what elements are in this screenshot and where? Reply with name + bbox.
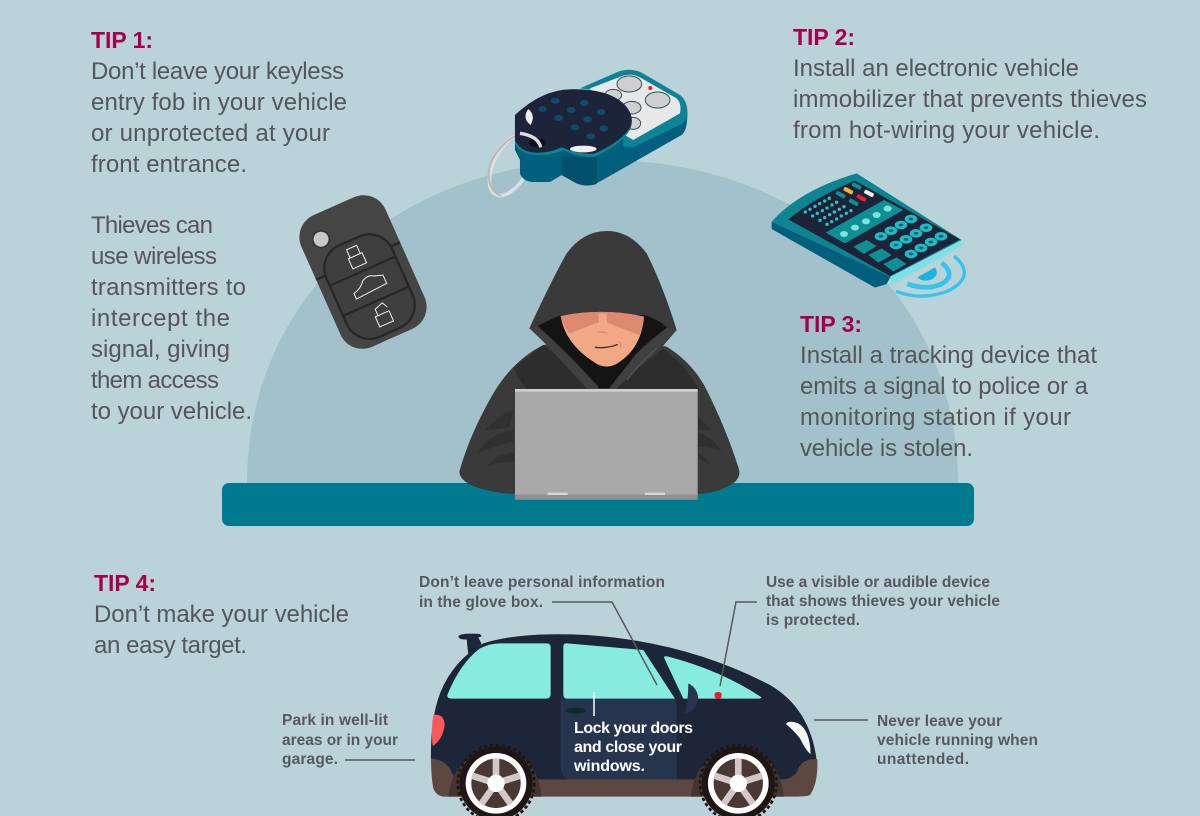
- TIP 1 body: entry fob in your vehicle: [91, 89, 347, 116]
- TIP 3 heading: TIP 3:: [800, 311, 862, 337]
- callout: visible or audible device: [720, 574, 1000, 686]
- callout: visible or audible device: is protected.: [766, 612, 860, 629]
- door panel: [561, 699, 677, 779]
- TIP 1 heading: TIP 1:: [91, 27, 153, 53]
- callout: glove box: Don’t leave personal information: [419, 574, 665, 591]
- icon: flip key fob: [292, 188, 434, 356]
- callout: visible or audible device: that shows thieves your vehicle: [766, 593, 1000, 610]
- laptop: [515, 389, 698, 500]
- TIP 1 body: front entrance.: [91, 151, 247, 178]
- hacker body: [459, 337, 739, 494]
- roof spoiler: [458, 634, 482, 655]
- red alarm light: [715, 692, 722, 699]
- callout: lock your doors: Lock your doors: [574, 720, 693, 737]
- windows: [447, 643, 762, 699]
- TIP 3 body: Install a tracking device that: [800, 342, 1097, 369]
- TIP 1 body: transmitters to: [91, 274, 246, 301]
- TIP 4 text block: [94, 570, 349, 659]
- front wheel: [691, 745, 784, 816]
- TIP 2 body: Install an electronic vehicle: [793, 55, 1079, 82]
- TIP 4 heading: TIP 4:: [94, 570, 156, 596]
- TIP 3 body: monitoring station if your: [800, 404, 1071, 431]
- callout: lock your doors: windows.: [573, 758, 645, 775]
- brown lower trim: [431, 758, 817, 797]
- TIP 1 body: [91, 58, 347, 425]
- headlight: [786, 722, 811, 754]
- callout: glove box: in the glove box.: [419, 594, 543, 611]
- car body: [431, 634, 817, 780]
- TIP 1 body: to your vehicle.: [91, 398, 252, 425]
- door handle: [566, 708, 586, 714]
- TIP 3 text block: [800, 311, 1097, 462]
- callout: park in well-lit areas: areas or in your: [282, 732, 398, 749]
- TIP 4 body: [94, 601, 349, 659]
- TIP 4 body: Don’t make your vehicle: [94, 601, 349, 628]
- TIP 2 body: immobilizer that prevents thieves: [793, 86, 1147, 113]
- hood: [529, 231, 677, 390]
- icon: alarm keypad device with signal waves: [772, 173, 964, 296]
- TIP 3 body: [800, 342, 1097, 462]
- callout: never leave vehicle running: [814, 713, 1038, 768]
- callout: never leave vehicle running: unattended.: [877, 751, 969, 768]
- callout: park in well-lit areas: [282, 712, 415, 768]
- TIP 1 body: use wireless: [91, 243, 217, 270]
- callout: never leave vehicle running: vehicle running when: [877, 732, 1038, 749]
- TIP 1 body: them access: [91, 367, 219, 394]
- TIP 1 text block: [91, 27, 347, 425]
- callout: park in well-lit areas: Park in well-lit: [282, 712, 388, 729]
- icon: remote key fob with ring: [480, 70, 687, 203]
- callout: never leave vehicle running: Never leave your: [877, 713, 1002, 730]
- TIP 1 body: or unprotected at your: [91, 120, 330, 147]
- callout: lock your doors: [573, 692, 693, 775]
- callout: lock your doors: and close your: [574, 739, 682, 756]
- TIP 1 body: Don’t leave your keyless: [91, 58, 344, 85]
- TIP 2 text block: [793, 24, 1147, 144]
- rear wheel: [448, 745, 542, 816]
- callout: visible or audible device: Use a visible or audible device: [766, 574, 990, 591]
- desk: [222, 483, 974, 526]
- tail light: [432, 715, 445, 746]
- callout: park in well-lit areas: garage.: [282, 751, 338, 768]
- face: [561, 312, 644, 367]
- background dome: [247, 160, 958, 484]
- TIP 1 body: intercept the: [91, 305, 230, 332]
- TIP 1 body: Thieves can: [91, 212, 213, 239]
- TIP 2 heading: TIP 2:: [793, 24, 855, 50]
- key ring: [480, 127, 542, 203]
- TIP 4 body: an easy target.: [94, 632, 247, 659]
- callout: glove box: [419, 574, 665, 685]
- TIP 3 body: emits a signal to police or a: [800, 373, 1089, 400]
- car illustration: [431, 634, 817, 816]
- TIP 2 body: from hot-wiring your vehicle.: [793, 117, 1100, 144]
- side mirror: [685, 683, 698, 714]
- hooded hacker at laptop: [459, 231, 739, 500]
- TIP 2 body: [793, 55, 1147, 144]
- TIP 1 body: signal, giving: [91, 336, 230, 363]
- TIP 3 body: vehicle is stolen.: [800, 435, 973, 462]
